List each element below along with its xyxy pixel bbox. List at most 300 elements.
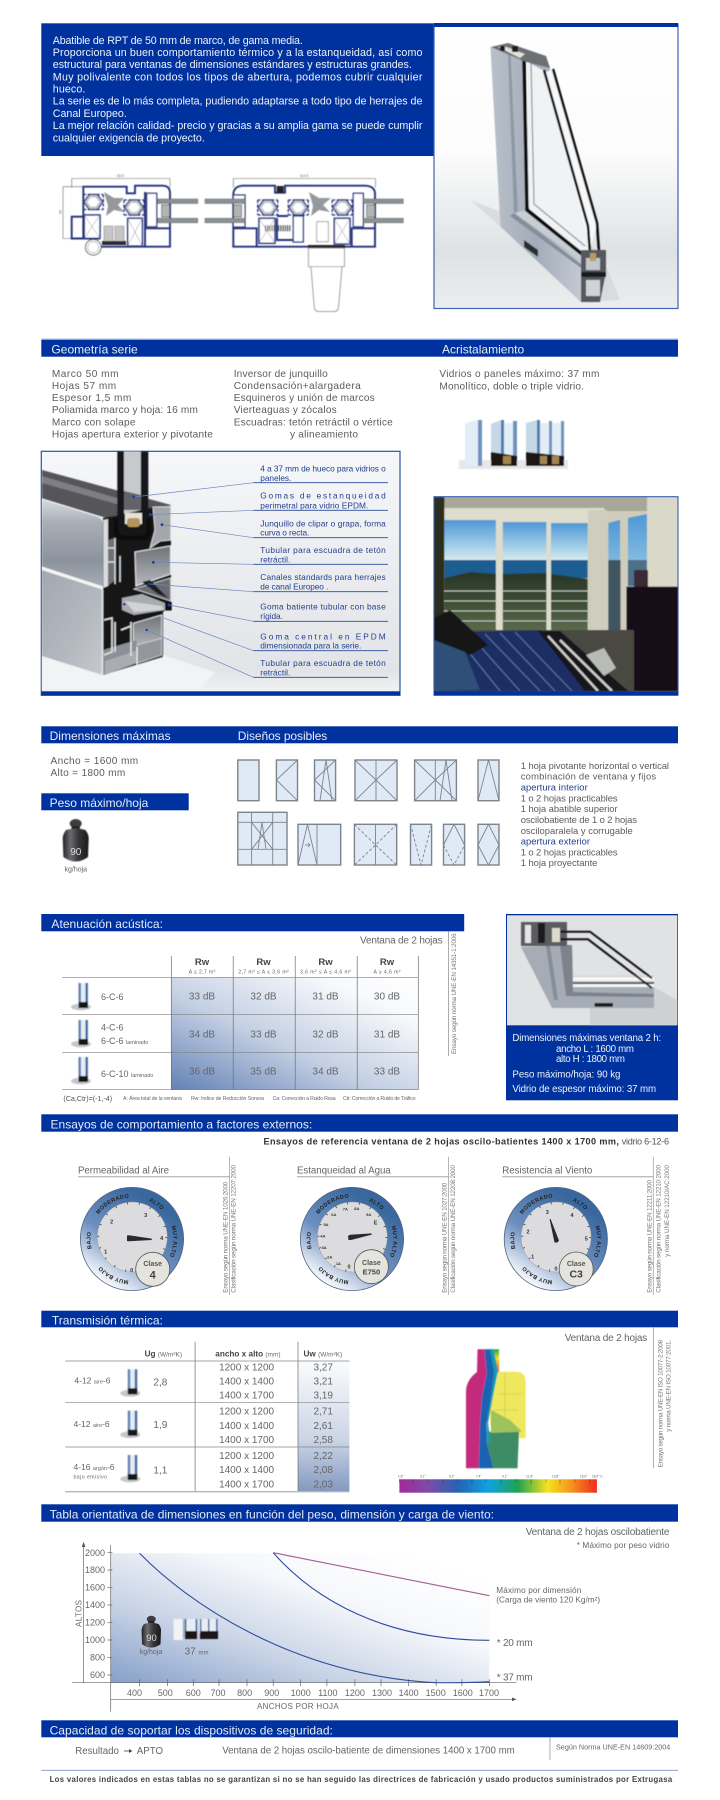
text block: geometry right column: Inversor de junquillo bbox=[234, 369, 328, 380]
table header: ancho x alto (mm) bbox=[215, 1350, 281, 1359]
table footnotes: (Ca,Ctr)=(-1,-4) bbox=[63, 1094, 112, 1103]
callouts text: Tubular para escuadra de tetón bbox=[260, 545, 386, 555]
x axis labels: 1500 bbox=[426, 1688, 446, 1698]
text block: design list: 1 o 2 hojas practicables bbox=[521, 846, 618, 857]
curve: 37 mm bbox=[140, 1553, 489, 1683]
section left: 50 bbox=[58, 210, 62, 214]
image: two leaf window bbox=[521, 922, 677, 1025]
label: 37 mm: * 37 mm bbox=[497, 1672, 533, 1684]
Uw values: 2,08 bbox=[313, 1465, 333, 1476]
callouts text: paneles. bbox=[260, 473, 291, 483]
Ug values: 1,9 bbox=[153, 1420, 168, 1431]
text block: design list: 1 hoja pivotante horizontal o vertical bbox=[521, 760, 669, 771]
Uw values bbox=[313, 1363, 333, 1490]
gauge dial: 6A bbox=[331, 1212, 336, 1217]
colour scale: 18.0° C bbox=[592, 1474, 603, 1478]
colour scale: 11.8° bbox=[526, 1474, 534, 1478]
x axis labels: 900 bbox=[264, 1688, 279, 1698]
gauge dial bbox=[300, 1187, 404, 1291]
gauge dial: MODERADO bbox=[520, 1194, 552, 1214]
icon: weight in chart bbox=[140, 1616, 162, 1656]
row labels: 4-12 aire-6 bbox=[74, 1375, 111, 1385]
gauge dial: E bbox=[374, 1221, 378, 1227]
label: maximum by dimension: (Carga de viento 120 Kg/m²) bbox=[496, 1595, 600, 1604]
gauge dial: 8A bbox=[354, 1206, 359, 1211]
text block: geometry left column bbox=[52, 369, 213, 440]
text block: geometry left column: Marco 50 mm bbox=[52, 369, 118, 380]
gauge dial: 2A bbox=[327, 1254, 332, 1260]
colour scale: 1.8° bbox=[398, 1474, 404, 1478]
gauge panel: permeabilidad al aire: Ensayo según norma UNE-EN 1026:2000 bbox=[222, 1181, 230, 1293]
class badge bbox=[354, 1250, 388, 1284]
text block: design list: apertura exterior bbox=[521, 836, 590, 846]
class badge bbox=[136, 1252, 170, 1286]
summary text: alto H : 1800 mm bbox=[556, 1054, 625, 1065]
label: maximum by dimension bbox=[496, 1586, 600, 1604]
table header: Rw bbox=[380, 957, 395, 968]
summary text: Dimensiones máximas ventana 2 h: bbox=[512, 1033, 661, 1044]
callouts text: 4 a 37 mm de hueco para vidrios o bbox=[260, 463, 386, 473]
text block: geometry left column: Hojas 57 mm bbox=[52, 381, 116, 392]
Uw values: 2,03 bbox=[313, 1479, 333, 1490]
gauge dial: MUY ALTO bbox=[170, 1226, 178, 1257]
gauge dial: 4 bbox=[160, 1236, 164, 1242]
gauge panel: estanqueidad al agua bbox=[297, 1156, 457, 1295]
curve: 20 mm bbox=[273, 1553, 489, 1640]
table values: 32 dB bbox=[250, 992, 277, 1002]
icon: weight 90 kg: 90 bbox=[70, 847, 82, 858]
gauge dial: MUY ALTO bbox=[390, 1226, 398, 1257]
gauge dial: 1 bbox=[104, 1250, 107, 1256]
text block: geometry left column: Espesor 1,5 mm bbox=[52, 393, 131, 404]
gauge dial: 2 bbox=[526, 1229, 530, 1235]
Uw values: 2,61 bbox=[313, 1421, 333, 1432]
callouts text: Canales standards para herrajes bbox=[260, 572, 386, 582]
text block: design list: apertura interior bbox=[521, 781, 588, 792]
line chart: sizes by leaf width bbox=[72, 1542, 600, 1712]
gauge dial: BAJO bbox=[510, 1232, 516, 1250]
class badge: Clase bbox=[362, 1260, 381, 1267]
label: ventana de 2 hojas thermal: Ventana de 2 hojas bbox=[565, 1333, 647, 1344]
gauge dial: 5A bbox=[323, 1222, 329, 1227]
text block: geometry left column: Poliamida marco y hoja: 16 mm bbox=[52, 405, 198, 416]
header bar: geometria and acristalamiento: Geometría serie bbox=[51, 342, 138, 356]
table header: Ug (W/m²K) bbox=[145, 1350, 182, 1359]
header bar: dimensiones and disenos: Diseños posibles bbox=[238, 729, 327, 743]
table header: Rw bbox=[318, 957, 333, 968]
callouts text: Tubular para escuadra de tetón bbox=[260, 658, 386, 668]
x axis labels: 700 bbox=[210, 1688, 226, 1698]
gauge dial: 5 bbox=[585, 1236, 588, 1242]
window type 6 bbox=[478, 760, 499, 801]
header bar: capacidad de soportar bbox=[41, 1720, 678, 1737]
Ug values bbox=[153, 1378, 168, 1476]
x axis labels: 1200 bbox=[345, 1688, 365, 1698]
window type 11 bbox=[444, 824, 465, 865]
table header bbox=[145, 1350, 342, 1359]
note: thermal test standard: Ensayo según norma UNE-EN ISO 10077-2:2008 bbox=[657, 1340, 664, 1467]
section base bbox=[103, 506, 171, 675]
upper left fins bbox=[103, 519, 108, 588]
gauge dial: MUY BAJO bbox=[522, 1267, 552, 1284]
class badge bbox=[559, 1252, 593, 1286]
gauge dial: MUY BAJO bbox=[318, 1267, 348, 1284]
callouts text: Junquillo de clipar o grapa, forma bbox=[260, 518, 386, 528]
intro text block: estructural para ventanas de dimensiones estándares y estructuras grandes. bbox=[53, 59, 412, 71]
header bar: dimensiones and disenos: Dimensiones máximas bbox=[50, 729, 171, 743]
gauge dial: ALTO bbox=[572, 1198, 588, 1210]
y axis labels: 800 bbox=[90, 1652, 105, 1662]
text block: geometry right column: y alineamiento bbox=[290, 429, 358, 440]
colour scale bbox=[398, 1474, 603, 1493]
callouts text: dimensionada para la serie. bbox=[260, 641, 361, 651]
gauge panel: estanqueidad al agua: Estanqueidad al Agua bbox=[297, 1166, 391, 1177]
section left bbox=[58, 174, 198, 255]
y axis labels bbox=[85, 1548, 105, 1680]
gauge dial: 1A bbox=[336, 1261, 341, 1266]
table values: 33 dB bbox=[374, 1066, 400, 1078]
reference test line: Ensayos de referencia ventana de 2 hojas oscilo-batientes 1400 x 1700 mm, bbox=[264, 1137, 619, 1147]
note: thermal test standard: y norma UNE-EN ISO 10077:2001. bbox=[666, 1340, 672, 1432]
gauge dial: MUY ALTO bbox=[594, 1226, 602, 1258]
header bar: transmision termica: Transmisión térmica: bbox=[52, 1314, 163, 1328]
header bar: geometria and acristalamiento bbox=[41, 340, 678, 357]
callouts text: de canal Europeo . bbox=[260, 582, 328, 592]
text: test window size: Ventana de 2 hojas oscilo-batiente de dimensiones 1400 x 1700 mm bbox=[222, 1746, 515, 1757]
panel: profile cutaway with callouts bbox=[41, 451, 400, 695]
intro text block: Abatible de RPT de 50 mm de marco, de gama media. bbox=[53, 35, 303, 47]
note: chart subtitle: * Máximo por peso vidrio bbox=[577, 1541, 670, 1550]
gauge panel: estanqueidad al agua: Clasificación según norma UNE-EN 12208:2000 bbox=[450, 1165, 457, 1293]
section right bbox=[205, 174, 403, 248]
x axis labels: 800 bbox=[237, 1688, 252, 1698]
section left: 53.5 bbox=[117, 174, 124, 178]
panel: two leaf window summary bbox=[506, 914, 678, 1100]
middle chamber bbox=[135, 546, 170, 586]
note: thermal test standard bbox=[653, 1327, 672, 1468]
note: safety standard: Según Norma UNE-EN 14609:2004 bbox=[556, 1742, 670, 1752]
class badge: Clase bbox=[143, 1261, 162, 1268]
text block: glazing: Monolítico, doble o triple vidrio. bbox=[439, 381, 584, 392]
note: acoustic test standard: Ensayo según norma UNE-EN 14351-1:2006 bbox=[451, 933, 458, 1054]
gauge dial: 3A bbox=[321, 1245, 327, 1250]
colour scale: 5.2° bbox=[449, 1474, 455, 1478]
table values: 30 dB bbox=[374, 992, 400, 1002]
table header bbox=[189, 957, 401, 976]
row labels: 4-16 argón-6 bbox=[74, 1462, 115, 1472]
table header: A ≤ 2,7 m² bbox=[189, 970, 216, 976]
row labels: bajo emisivo bbox=[74, 1475, 107, 1481]
header bar: peso maximo bbox=[41, 793, 189, 810]
table footnotes: Ca: Corrección a Ruido Rosa bbox=[273, 1096, 336, 1102]
window type 8 bbox=[298, 824, 341, 865]
callout leader lines bbox=[123, 483, 253, 677]
row labels: 6-C-10 laminado bbox=[101, 1069, 153, 1079]
header bar: geometria and acristalamiento: Acristalamiento bbox=[442, 342, 525, 356]
Uw values: 2,58 bbox=[313, 1435, 333, 1446]
gauge dial: 0 bbox=[347, 1265, 351, 1271]
y axis labels: 1800 bbox=[85, 1565, 105, 1575]
gauge panel: estanqueidad al agua: Ensayo según norma UNE-EN 1027:2000 bbox=[442, 1182, 448, 1293]
intro text block: Canal Europeo. bbox=[53, 108, 127, 120]
window type 10 bbox=[410, 824, 432, 865]
table header: A ≥ 4,6 m² bbox=[374, 970, 401, 976]
gauge dial: BAJO bbox=[86, 1232, 92, 1250]
needle bbox=[550, 1219, 559, 1242]
gauge dial: 9A bbox=[366, 1212, 371, 1217]
window type 12 bbox=[478, 824, 499, 865]
table values: 32 dB bbox=[312, 1030, 339, 1040]
header bar: atenuacion acustica bbox=[41, 914, 464, 931]
colour scale: 7.4° bbox=[476, 1474, 482, 1478]
icon: handle bbox=[308, 248, 344, 311]
text block: maximum dimensions bbox=[50, 756, 138, 779]
x axis labels: 1400 bbox=[399, 1688, 419, 1698]
callouts text: Gomas de estanqueidad bbox=[260, 491, 386, 501]
y axis labels: 1000 bbox=[85, 1635, 105, 1645]
callouts text: Goma batiente tubular con base bbox=[260, 602, 386, 612]
note: safety standard bbox=[550, 1737, 670, 1760]
gauge dial: 4 bbox=[570, 1213, 574, 1219]
result: apto: Resultado bbox=[75, 1746, 119, 1757]
section right: 114.5 bbox=[300, 174, 308, 178]
callouts text: perimetral para vidrio EPDM. bbox=[260, 501, 368, 511]
header bar: transmision termica bbox=[41, 1311, 678, 1328]
header bar: tabla orientativa: Tabla orientativa de dimensiones en función del peso, dimensión y carga de viento: bbox=[50, 1508, 494, 1522]
table header: Rw bbox=[256, 957, 271, 968]
Uw values: 2,22 bbox=[313, 1451, 333, 1462]
icon: weight in chart: 90 bbox=[146, 1633, 157, 1644]
intro text block: La serie es de lo más completa, pudiendo adaptarse a todo tipo de herrajes de bbox=[53, 96, 422, 108]
x axis labels: 500 bbox=[158, 1688, 173, 1698]
table values: 34 dB bbox=[312, 1066, 339, 1078]
gauge dial: MUY BAJO bbox=[98, 1267, 128, 1284]
Uw values: 3,19 bbox=[313, 1390, 333, 1401]
row labels bbox=[101, 992, 153, 1079]
intro text block: Muy polivalente con todos los tipos de abertura, podemos cubrir cualquier bbox=[53, 71, 423, 83]
colour scale: 13.8° bbox=[552, 1474, 560, 1478]
row icons bbox=[120, 1369, 140, 1482]
gauge dial: 0 bbox=[130, 1268, 133, 1274]
row labels: 4-C-6 bbox=[101, 1022, 124, 1032]
table values bbox=[189, 992, 400, 1078]
gauge dial bbox=[504, 1187, 608, 1291]
text block: glazing bbox=[439, 369, 599, 392]
text block: maximum dimensions: Alto = 1800 mm bbox=[50, 768, 125, 779]
gauge dial: ALTO bbox=[149, 1198, 164, 1210]
window opening designs bbox=[238, 760, 499, 865]
text block: geometry left column: Marco con solape bbox=[52, 417, 136, 428]
text block: geometry right column: Escuadras: tetón retráctil o vértice bbox=[234, 417, 393, 428]
gauge panel: permeabilidad al aire bbox=[78, 1156, 238, 1295]
gauge panel: resistencia al viento: Resistencia al Viento bbox=[502, 1166, 592, 1177]
callouts text: Goma central en EPDM bbox=[260, 631, 386, 641]
header bar: ensayos de comportamiento: Ensayos de comportamiento a factores externos: bbox=[50, 1118, 312, 1132]
image: profile cutaway bbox=[42, 452, 215, 690]
result: apto: APTO bbox=[137, 1746, 163, 1757]
text block: design list: 1 o 2 hojas practicables bbox=[521, 792, 618, 803]
header bar: dimensiones and disenos bbox=[41, 726, 678, 743]
dimensions column: 1200 x 1200 bbox=[219, 1451, 275, 1462]
reference test line: vidrio 6-12-6 bbox=[622, 1137, 669, 1147]
callouts text: retráctil. bbox=[260, 555, 290, 565]
text block: geometry right column: Vierteaguas y zócalos bbox=[234, 405, 337, 416]
image: room photo with sea view bbox=[434, 497, 678, 695]
gauge panel: permeabilidad al aire: Permeabilidad al Aire bbox=[78, 1166, 169, 1177]
table values: 31 dB bbox=[374, 1030, 400, 1040]
dimensions column: 1400 x 1400 bbox=[219, 1465, 275, 1476]
class badge: Clase bbox=[567, 1261, 586, 1268]
table values: 34 dB bbox=[189, 1030, 215, 1040]
gauge panel: resistencia al viento: Ensayo según norma UNE-EN 12211:2000 bbox=[647, 1180, 654, 1293]
x axis labels bbox=[127, 1688, 499, 1698]
colour scale: 3.1° bbox=[420, 1474, 426, 1478]
gauge panel: resistencia al viento bbox=[502, 1156, 671, 1295]
text block: design list: 1 hoja abatible superior bbox=[521, 803, 618, 814]
gauge dial: BAJO bbox=[306, 1232, 312, 1250]
gauge dial: 7A bbox=[343, 1206, 348, 1212]
text block: design list bbox=[521, 760, 669, 868]
table header: Uw (W/m²K) bbox=[304, 1350, 342, 1359]
dimensions column: 1200 x 1200 bbox=[219, 1363, 275, 1374]
y axis labels: 1200 bbox=[85, 1618, 105, 1628]
table footnotes: Ctr: Corrección a Ruido de Tráfico bbox=[343, 1096, 416, 1102]
intro text block: La mejor relación calidad- precio y gracias a su amplia gama se puede cumplir bbox=[53, 120, 423, 132]
Ug values: 2,8 bbox=[153, 1378, 168, 1388]
window type 3 bbox=[314, 760, 336, 801]
chart: thermal simulation of profile bbox=[398, 1349, 603, 1493]
row icons bbox=[71, 983, 91, 1084]
header bar: tabla orientativa bbox=[41, 1504, 678, 1522]
row labels: 6-C-6 bbox=[101, 992, 124, 1002]
dimensions column: 1400 x 1700 bbox=[219, 1390, 275, 1401]
gauge dial: 4A bbox=[320, 1234, 325, 1238]
summary text: ancho L : 1600 mm bbox=[556, 1044, 634, 1055]
callouts text: rígida. bbox=[260, 611, 283, 621]
label: maximum by dimension: Máximo por dimensión bbox=[496, 1586, 582, 1595]
callouts text bbox=[253, 463, 388, 678]
window type 4 bbox=[355, 760, 397, 801]
intro text block: cualquier exigencia de proyecto. bbox=[53, 132, 205, 144]
icon: weight in chart: kg/hoja bbox=[140, 1649, 162, 1656]
row labels: 6-C-6 laminado bbox=[101, 1036, 148, 1046]
icon: glass in chart: 37 mm bbox=[185, 1646, 209, 1658]
gauge panel: resistencia al viento: y norma UNE-EN 12210/AC:2000 bbox=[664, 1165, 671, 1257]
table footnotes: Rw: Indice de Reducción Sonora bbox=[191, 1096, 264, 1102]
header bar: atenuacion acustica: Atenuación acústica: bbox=[51, 917, 163, 931]
colour scale: 9.1° bbox=[502, 1474, 508, 1478]
dimensions column: 1400 x 1400 bbox=[219, 1376, 275, 1387]
gauge dial: 1 bbox=[531, 1255, 534, 1261]
class badge: E750 bbox=[363, 1268, 380, 1276]
dimensions column: 1400 x 1400 bbox=[219, 1421, 275, 1432]
Uw values: 3,21 bbox=[313, 1376, 333, 1387]
icon: glazing units bbox=[459, 420, 568, 469]
channel bbox=[134, 578, 170, 601]
row labels bbox=[74, 1375, 115, 1481]
x axis labels: 1100 bbox=[318, 1688, 337, 1698]
top chamber bbox=[150, 507, 171, 548]
axes bbox=[72, 1542, 516, 1712]
gauge dial bbox=[80, 1187, 184, 1291]
table values: 31 dB bbox=[312, 992, 339, 1002]
intro text block: Proporciona un buen comportamiento térmico y a la estanqueidad, así como bbox=[53, 47, 422, 59]
header bar: ensayos de comportamiento bbox=[41, 1114, 678, 1132]
dimensions column: 1400 x 1700 bbox=[219, 1479, 275, 1490]
needle bbox=[348, 1233, 372, 1240]
summary text: Peso máximo/hoja: 90 kg bbox=[512, 1070, 620, 1080]
icon: weight 90 kg bbox=[63, 819, 89, 874]
lower chamber bbox=[133, 615, 162, 647]
note: chart subtitle bbox=[526, 1527, 670, 1550]
dimensions column: 1400 x 1700 bbox=[219, 1435, 275, 1446]
window type 5 bbox=[415, 760, 456, 801]
x axis labels: 1600 bbox=[453, 1688, 473, 1698]
label: 20 mm: * 20 mm bbox=[497, 1638, 533, 1649]
callouts text: curva o recta. bbox=[260, 528, 309, 538]
row labels: 4-12 aire-6 bbox=[74, 1419, 110, 1429]
gauge dial: 2 bbox=[110, 1220, 113, 1226]
summary text bbox=[512, 1033, 661, 1095]
class badge: C3 bbox=[569, 1268, 583, 1280]
gauge dial: 0 bbox=[554, 1267, 558, 1273]
intro text block bbox=[53, 35, 423, 144]
text block: design list: osciloparalela y corrugable bbox=[521, 825, 633, 836]
text block: geometry right column bbox=[234, 369, 393, 440]
x axis title: ANCHOS POR HOJA bbox=[257, 1702, 339, 1711]
Ug values: 1,1 bbox=[153, 1466, 168, 1476]
footer disclaimer: Los valores indicados en estas tablas no se garantizan si no se han seguido las directrices de fabricación y usado productos suministrados por Extrugasa bbox=[50, 1775, 673, 1784]
x axis labels: 400 bbox=[127, 1688, 142, 1698]
needle bbox=[127, 1235, 152, 1241]
table footnotes: A: Área total de la ventana bbox=[123, 1095, 182, 1102]
Uw values: 3,27 bbox=[313, 1363, 333, 1374]
table values: 33 dB bbox=[189, 992, 215, 1002]
class badge: 4 bbox=[150, 1270, 157, 1282]
result: apto bbox=[75, 1746, 163, 1757]
diagram: window cross sections bbox=[58, 174, 403, 311]
table values: 33 dB bbox=[250, 1030, 277, 1040]
x axis labels: 1300 bbox=[372, 1688, 392, 1698]
table values: 36 dB bbox=[189, 1066, 215, 1078]
callouts text: retráctil. bbox=[260, 668, 290, 678]
text block: geometry left column: Hojas apertura exterior y pivotante bbox=[52, 429, 213, 440]
image: window corner product render bbox=[434, 23, 678, 308]
text block: design list: oscilobatiente de 1 o 2 hojas bbox=[521, 814, 637, 825]
text block: glazing: Vidrios o paneles máximo: 37 mm bbox=[439, 369, 599, 380]
label: ventana de 2 hojas: Ventana de 2 hojas bbox=[360, 935, 443, 946]
x axis labels: 1000 bbox=[291, 1688, 311, 1698]
text block: geometry right column: Condensación+alargadera bbox=[234, 381, 361, 392]
y axis labels: 600 bbox=[90, 1670, 105, 1680]
table: thermal transmittance bbox=[65, 1342, 349, 1492]
gauge dial: MODERADO bbox=[96, 1194, 128, 1214]
window type 2 bbox=[276, 760, 298, 801]
y axis title: ALTOS bbox=[74, 1600, 84, 1627]
window type 9 bbox=[354, 824, 397, 865]
table: acoustic attenuation bbox=[62, 956, 418, 1103]
text block: design list: 1 hoja proyectante bbox=[521, 857, 597, 868]
gauge panel: resistencia al viento: Clasificación según norma UNE-EN 12210:2000 bbox=[656, 1165, 662, 1293]
text block: design list: combinación de ventana y fijos bbox=[521, 770, 656, 782]
icon: glass in chart bbox=[174, 1619, 218, 1658]
gauge dial: ALTO bbox=[369, 1198, 384, 1210]
table header: 3,6 m² ≤ A ≤ 4,6 m² bbox=[300, 970, 351, 976]
header bar: peso maximo: Peso máximo/hoja bbox=[50, 796, 149, 810]
y axis labels: 1600 bbox=[85, 1582, 105, 1592]
header bar: capacidad de soportar: Capacidad de soportar los dispositivos de seguridad: bbox=[50, 1723, 333, 1737]
window type 7 bbox=[238, 812, 287, 865]
